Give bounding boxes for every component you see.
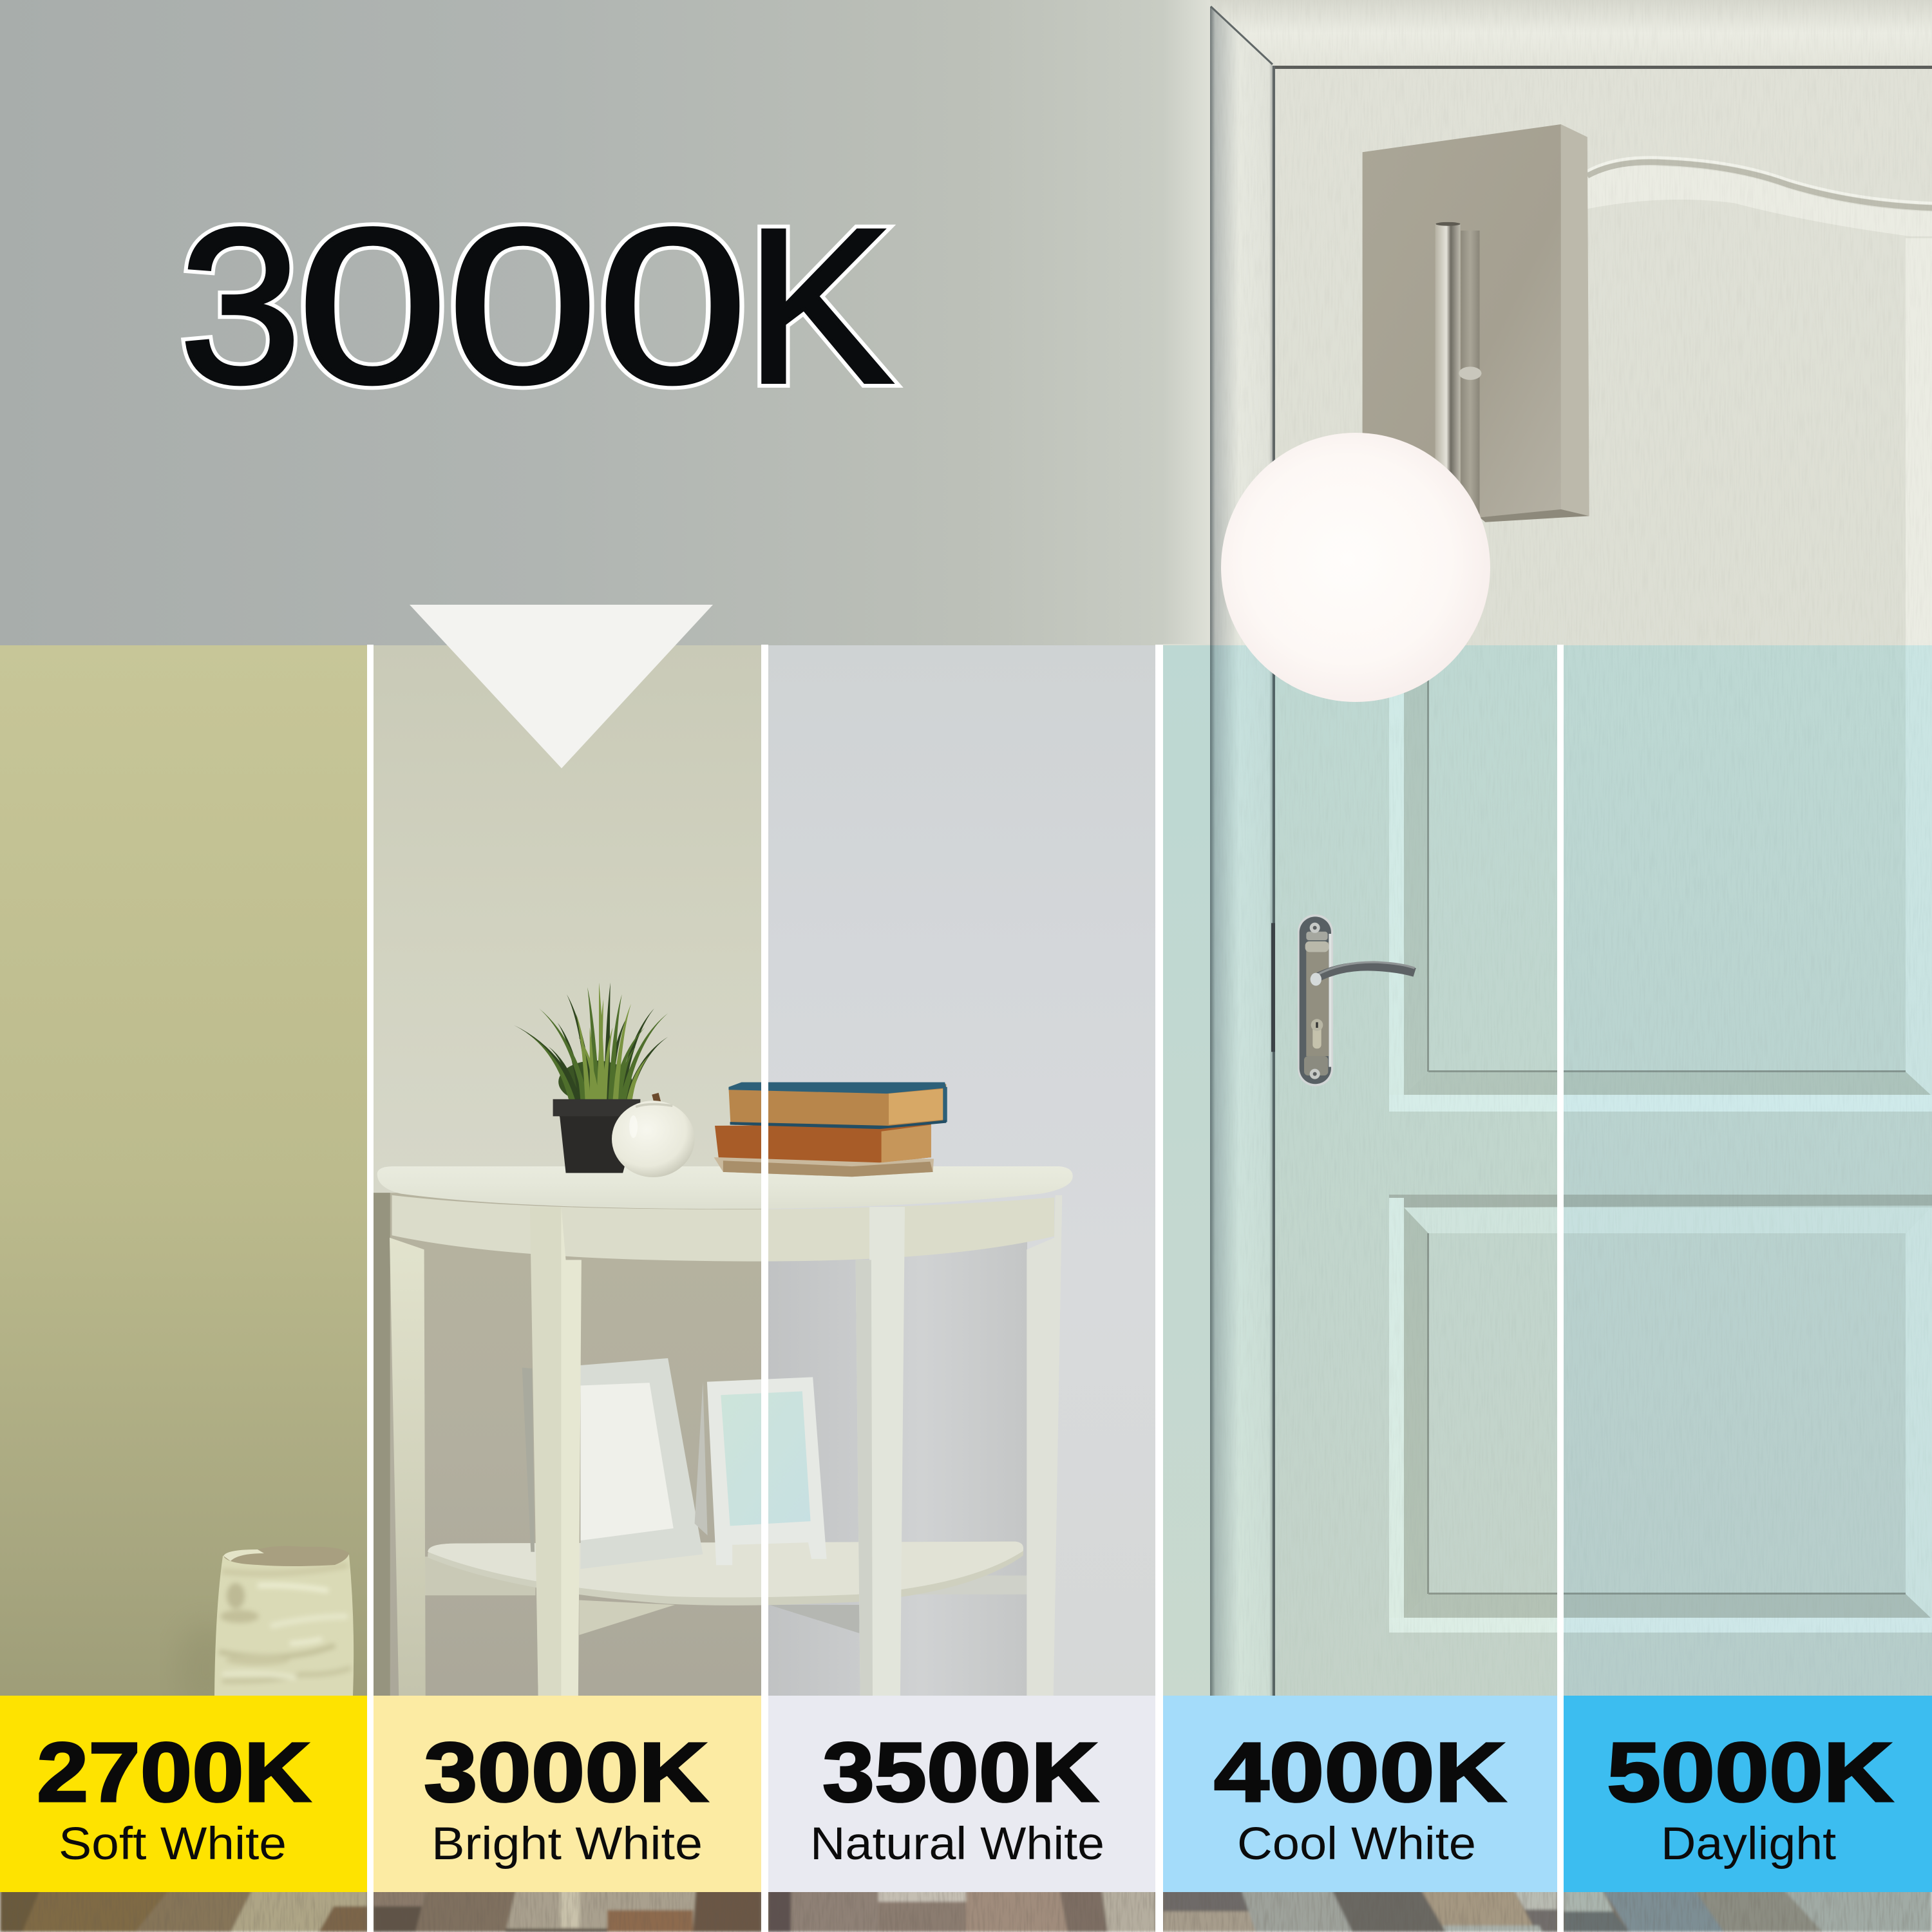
panel: 4000K blue tint	[1163, 645, 1557, 1701]
swatch: 2700K Soft White	[0, 1696, 367, 1892]
swatch: 5000K Daylight: Daylight	[1661, 1819, 1836, 1870]
lower wall sliver beside the door frame	[1163, 644, 1211, 1700]
panel: 3500K wall	[768, 645, 1155, 1701]
title: 3000K: K	[745, 183, 893, 429]
picture frame, aqua	[695, 1377, 827, 1565]
ceramic apple	[612, 1093, 695, 1177]
swatch: 2700K Soft White: Soft White	[59, 1819, 287, 1870]
shadowed wall under table	[374, 1193, 1027, 1718]
swatch: 5000K Daylight	[1564, 1696, 1932, 1892]
console table scene	[374, 983, 1073, 1718]
picture frame, ornate	[522, 1358, 703, 1569]
door rail and lower panel	[1389, 644, 1932, 1633]
door handle	[1271, 914, 1415, 1086]
title: 3000K: 000	[298, 183, 748, 429]
column divider lines	[367, 645, 1564, 1932]
panel: 2700K wall	[0, 645, 367, 1701]
swatch: 3500K Natural White: 3500K	[822, 1725, 1099, 1819]
table top	[377, 1166, 1073, 1209]
swatch: 5000K Daylight: 5000K	[1607, 1725, 1893, 1819]
sconce rods	[1435, 222, 1481, 514]
swatch: 3000K Bright White: Bright White	[431, 1819, 703, 1870]
title: 3000K: 3	[179, 183, 301, 429]
table legs	[390, 1195, 1062, 1696]
door with frame and panels	[1210, 0, 1932, 1701]
floor planks	[0, 1887, 1932, 1932]
apron under table top	[392, 1195, 1054, 1262]
swatch: 3000K Bright White	[374, 1696, 761, 1892]
upper wall background	[0, 0, 1211, 645]
door upper panel with arched top	[1389, 157, 1932, 1112]
wall sconce backplate	[1363, 124, 1589, 522]
panel: 5000K blue tint	[1564, 645, 1932, 1701]
swatch: 4000K Cool White: Cool White	[1237, 1819, 1476, 1870]
ceramic vase	[214, 1548, 354, 1696]
swatch: 4000K Cool White	[1163, 1696, 1557, 1892]
title: 3000K: K	[745, 183, 893, 429]
door wood grain	[1211, 0, 1932, 1700]
lower shelf	[425, 1542, 1027, 1635]
title: 3000K	[179, 183, 893, 429]
swatch: 2700K Soft White: 2700K	[37, 1725, 311, 1819]
title: 3000K: 000	[298, 183, 748, 429]
potted plant	[514, 983, 668, 1173]
panel: 3000K wall	[374, 645, 761, 1701]
arrow: downward triangle pointing to 3000K column	[410, 605, 713, 768]
stack of books	[714, 1082, 947, 1177]
swatch: 3500K Natural White	[768, 1696, 1155, 1892]
title: 3000K: 3	[179, 183, 301, 429]
globe light bulb	[1221, 433, 1490, 702]
swatch: 4000K Cool White: 4000K	[1214, 1725, 1506, 1819]
swatch: 3000K Bright White: 3000K	[424, 1725, 708, 1819]
swatch: 3500K Natural White: Natural White	[810, 1819, 1104, 1870]
